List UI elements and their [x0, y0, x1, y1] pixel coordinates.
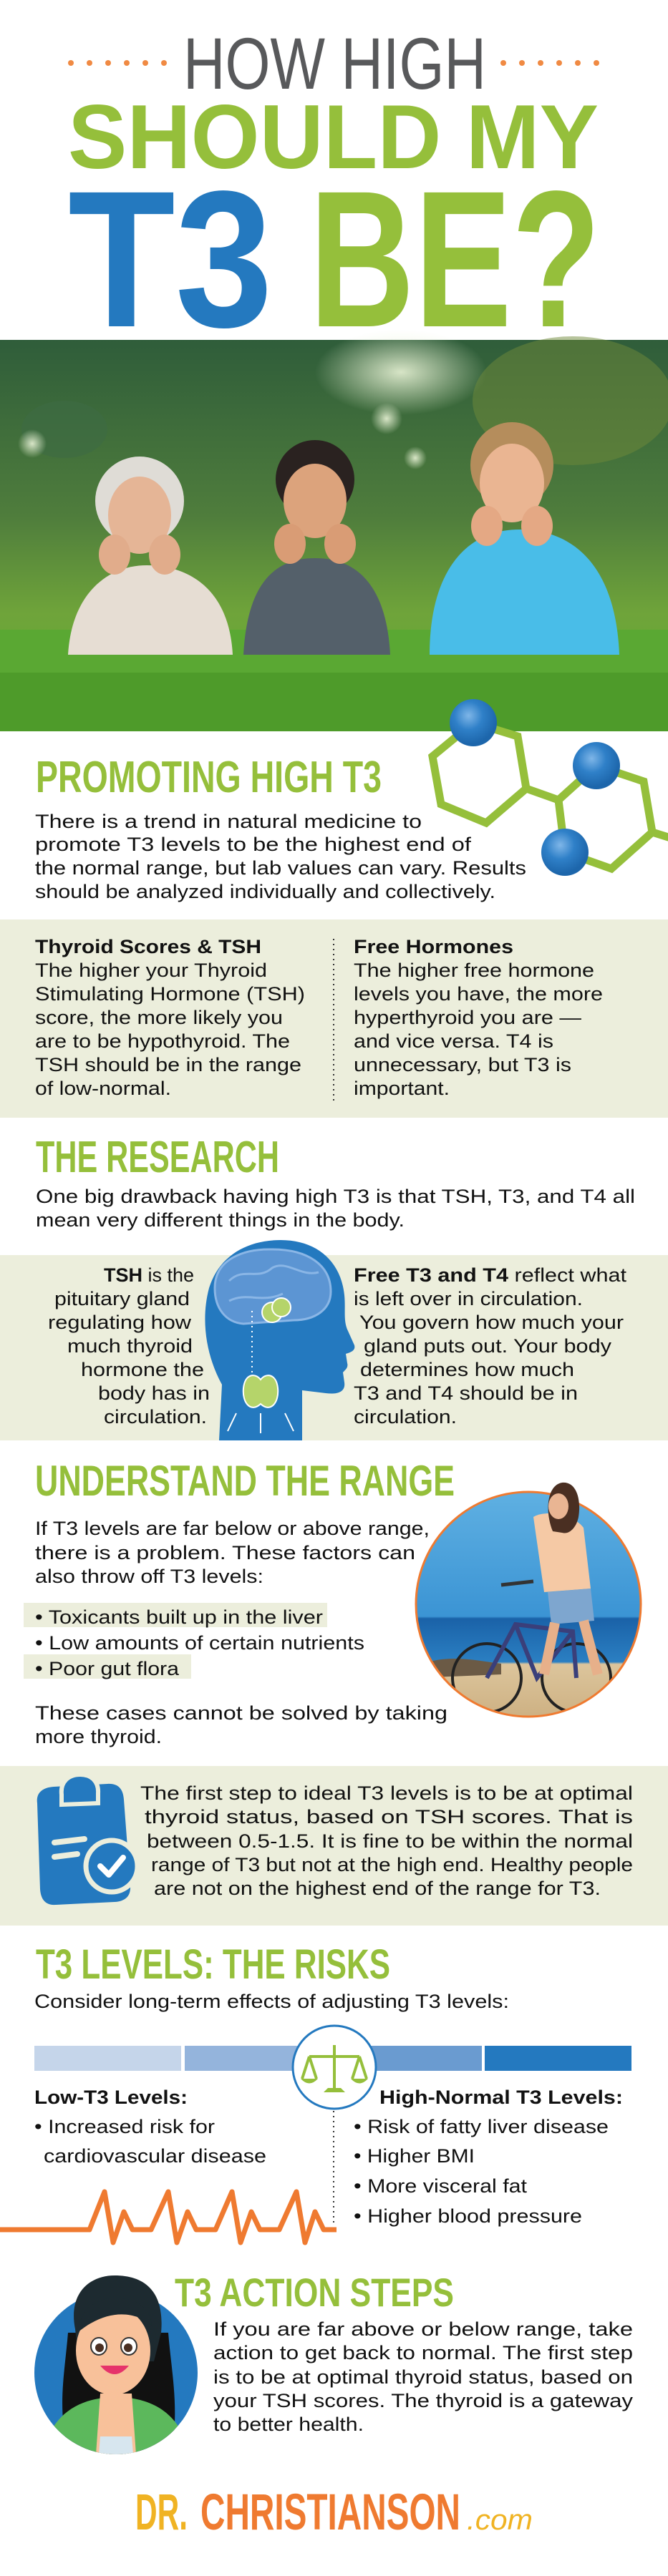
research paragraph [36, 1186, 635, 1231]
heading: the research: THE RESEARCH [36, 1133, 279, 1182]
range paragraph: If T3 levels are far below or above range, [35, 1518, 430, 1539]
column: thyroid scores & TSH: are to be hypothyroid. The [35, 1030, 290, 1052]
text: free T3 and T4 [354, 1264, 627, 1428]
range paragraph [35, 1518, 430, 1587]
closing note: more thyroid. [35, 1726, 162, 1747]
column: thyroid scores & TSH: The higher your Thyroid [35, 960, 267, 981]
text: free T3 and T4: circulation. [354, 1406, 457, 1428]
icon: cartoon woman avatar [34, 2275, 198, 2454]
action steps paragraph: to better health. [213, 2414, 364, 2435]
factor list [24, 1603, 364, 1679]
action steps paragraph [213, 2318, 634, 2435]
title line: should my: SHOULD MY [68, 86, 599, 187]
callout text: The first step to ideal T3 levels is to be at optimal [140, 1782, 633, 1804]
callout text: range of T3 but not at the high end. Healthy people [151, 1854, 633, 1875]
title dots left [68, 60, 167, 66]
text: TSH: pituitary gland [54, 1288, 190, 1309]
column: free hormones: Free Hormones [354, 936, 513, 957]
callout text: thyroid status, based on TSH scores. That is [145, 1806, 633, 1828]
section: promoting high T3 [35, 699, 668, 902]
column: thyroid scores & TSH: of low-normal. [35, 1078, 171, 1099]
column: high-normal T3 levels [354, 2087, 623, 2227]
column: high-normal T3 levels: • Higher BMI [354, 2145, 475, 2167]
icon: head with brain and thyroid [205, 1240, 354, 1440]
factor list: • Poor gut flora [35, 1658, 180, 1679]
column: free hormones: and vice versa. T4 is [354, 1030, 553, 1052]
text: TSH: circulation. [104, 1406, 207, 1428]
text: free T3 and T4: T3 and T4 should be in [354, 1382, 578, 1404]
column: high-normal T3 levels: • Risk of fatty liver disease [354, 2116, 609, 2137]
column: thyroid scores & TSH [35, 936, 305, 1099]
column: high-normal T3 levels: • More visceral fat [354, 2175, 528, 2197]
icon: heartbeat line [0, 2192, 337, 2243]
text: TSH: much thyroid [67, 1335, 193, 1357]
callout text: are not on the highest end of the range for T3. [154, 1878, 601, 1899]
title dots right [500, 60, 599, 66]
action steps paragraph: action to get back to normal. The first step [213, 2342, 633, 2363]
panel: thyroid scores and free hormones [0, 919, 668, 1118]
logo: Dr. Christianson .com: CHRISTIANSON [200, 2484, 460, 2541]
column: thyroid scores & TSH: Stimulating Hormone (TSH) [35, 983, 305, 1005]
column: free hormones: important. [354, 1078, 450, 1099]
column: thyroid scores & TSH: Thyroid Scores & TSH [35, 936, 261, 957]
factor list: • Low amounts of certain nutrients [35, 1632, 364, 1654]
icon: balance scale [293, 2026, 376, 2109]
text: TSH: regulating how [48, 1312, 192, 1333]
column: high-normal T3 levels: High-Normal T3 Levels: [379, 2087, 623, 2108]
heading: promoting high T3: PROMOTING HIGH T3 [36, 753, 382, 802]
panel: first step callout [0, 1766, 668, 1926]
range paragraph: there is a problem. These factors can [35, 1542, 415, 1563]
heading: T3 action steps: T3 ACTION STEPS [175, 2270, 454, 2315]
column: low T3 levels: Low-T3 Levels: [34, 2087, 188, 2108]
action steps paragraph: If you are far above or below range, take [213, 2318, 633, 2340]
text: TSH: hormone the [81, 1359, 204, 1380]
column: thyroid scores & TSH: score, the more likely you [35, 1007, 283, 1028]
column: free hormones: The higher free hormone [354, 960, 594, 981]
column: high-normal T3 levels: • Higher blood pressure [354, 2205, 582, 2227]
section: the research [36, 1133, 635, 1231]
photo: woman on bicycle [415, 1483, 642, 1719]
hero photo: three women on grass [0, 329, 668, 731]
column: free hormones: hyperthyroid you are — [354, 1007, 581, 1028]
research paragraph: mean very different things in the body. [36, 1209, 405, 1231]
column: free hormones: unnecessary, but T3 is [354, 1054, 571, 1075]
text: free T3 and T4: gland puts out. Your body [364, 1335, 612, 1357]
callout text [140, 1782, 633, 1899]
heading: T3 levels the risks: T3 LEVELS: THE RISKS [36, 1941, 390, 1988]
text: TSH: body has in [98, 1382, 210, 1404]
action steps paragraph: is to be at optimal thyroid status, based on [213, 2366, 633, 2388]
woman 1 [68, 457, 233, 655]
woman 3 [430, 422, 619, 655]
column: low T3 levels [34, 2087, 266, 2167]
column: low T3 levels: cardiovascular disease [44, 2145, 266, 2167]
section: T3 action steps [34, 2270, 634, 2454]
research paragraph: One big drawback having high T3 is that TSH, T3, and T4 all [36, 1186, 635, 1207]
icon: molecule [432, 699, 668, 876]
panel: TSH vs free T3/T4 [0, 1240, 668, 1440]
woman 2 [243, 440, 390, 655]
column: low T3 levels: • Increased risk for [34, 2116, 215, 2137]
intro paragraph: There is a trend in natural medicine to [35, 811, 422, 832]
factor list: • Toxicants built up in the liver [35, 1606, 323, 1628]
text: free T3 and T4: is left over in circulation. [354, 1288, 583, 1309]
action steps paragraph: your TSH scores. The thyroid is a gateway [213, 2390, 634, 2411]
text: free T3 and T4: You govern how much your [359, 1312, 624, 1333]
intro paragraph: the normal range, but lab values can vary. Results [35, 857, 526, 879]
section: T3 levels the risks [0, 1941, 631, 2243]
logo: Dr. Christianson .com: .com [467, 2504, 533, 2536]
intro line: Consider long-term effects of adjusting T3 levels: [34, 1991, 509, 2012]
intro paragraph: should be analyzed individually and collectively. [35, 881, 495, 902]
range paragraph: also throw off T3 levels: [35, 1566, 263, 1587]
text: TSH: TSH is the [104, 1264, 194, 1286]
section: understand the range [24, 1457, 642, 1747]
column: free hormones: levels you have, the more [354, 983, 603, 1005]
column: thyroid scores & TSH: TSH should be in the range [35, 1054, 301, 1075]
intro paragraph: promote T3 levels to be the highest end of [35, 834, 472, 855]
logo: Dr. Christianson .com: DR. [135, 2484, 188, 2541]
text: TSH [48, 1264, 210, 1428]
title line: how high: HOW HIGH [183, 23, 486, 104]
heading: understand the range: UNDERSTAND THE RANGE [35, 1457, 455, 1505]
closing note: These cases cannot be solved by taking [35, 1702, 447, 1724]
text: free T3 and T4: determines how much [360, 1359, 574, 1380]
text: free T3 and T4: Free T3 and T4 reflect what [354, 1264, 627, 1286]
column: free hormones [354, 936, 603, 1099]
title line: T3: T3 [68, 150, 273, 368]
intro paragraph [35, 811, 526, 902]
icon: clipboard with check [37, 1775, 137, 1905]
callout text: between 0.5-1.5. It is fine to be within the normal [147, 1830, 633, 1852]
range bar [34, 2046, 631, 2071]
closing note [35, 1702, 447, 1747]
title [68, 23, 601, 368]
